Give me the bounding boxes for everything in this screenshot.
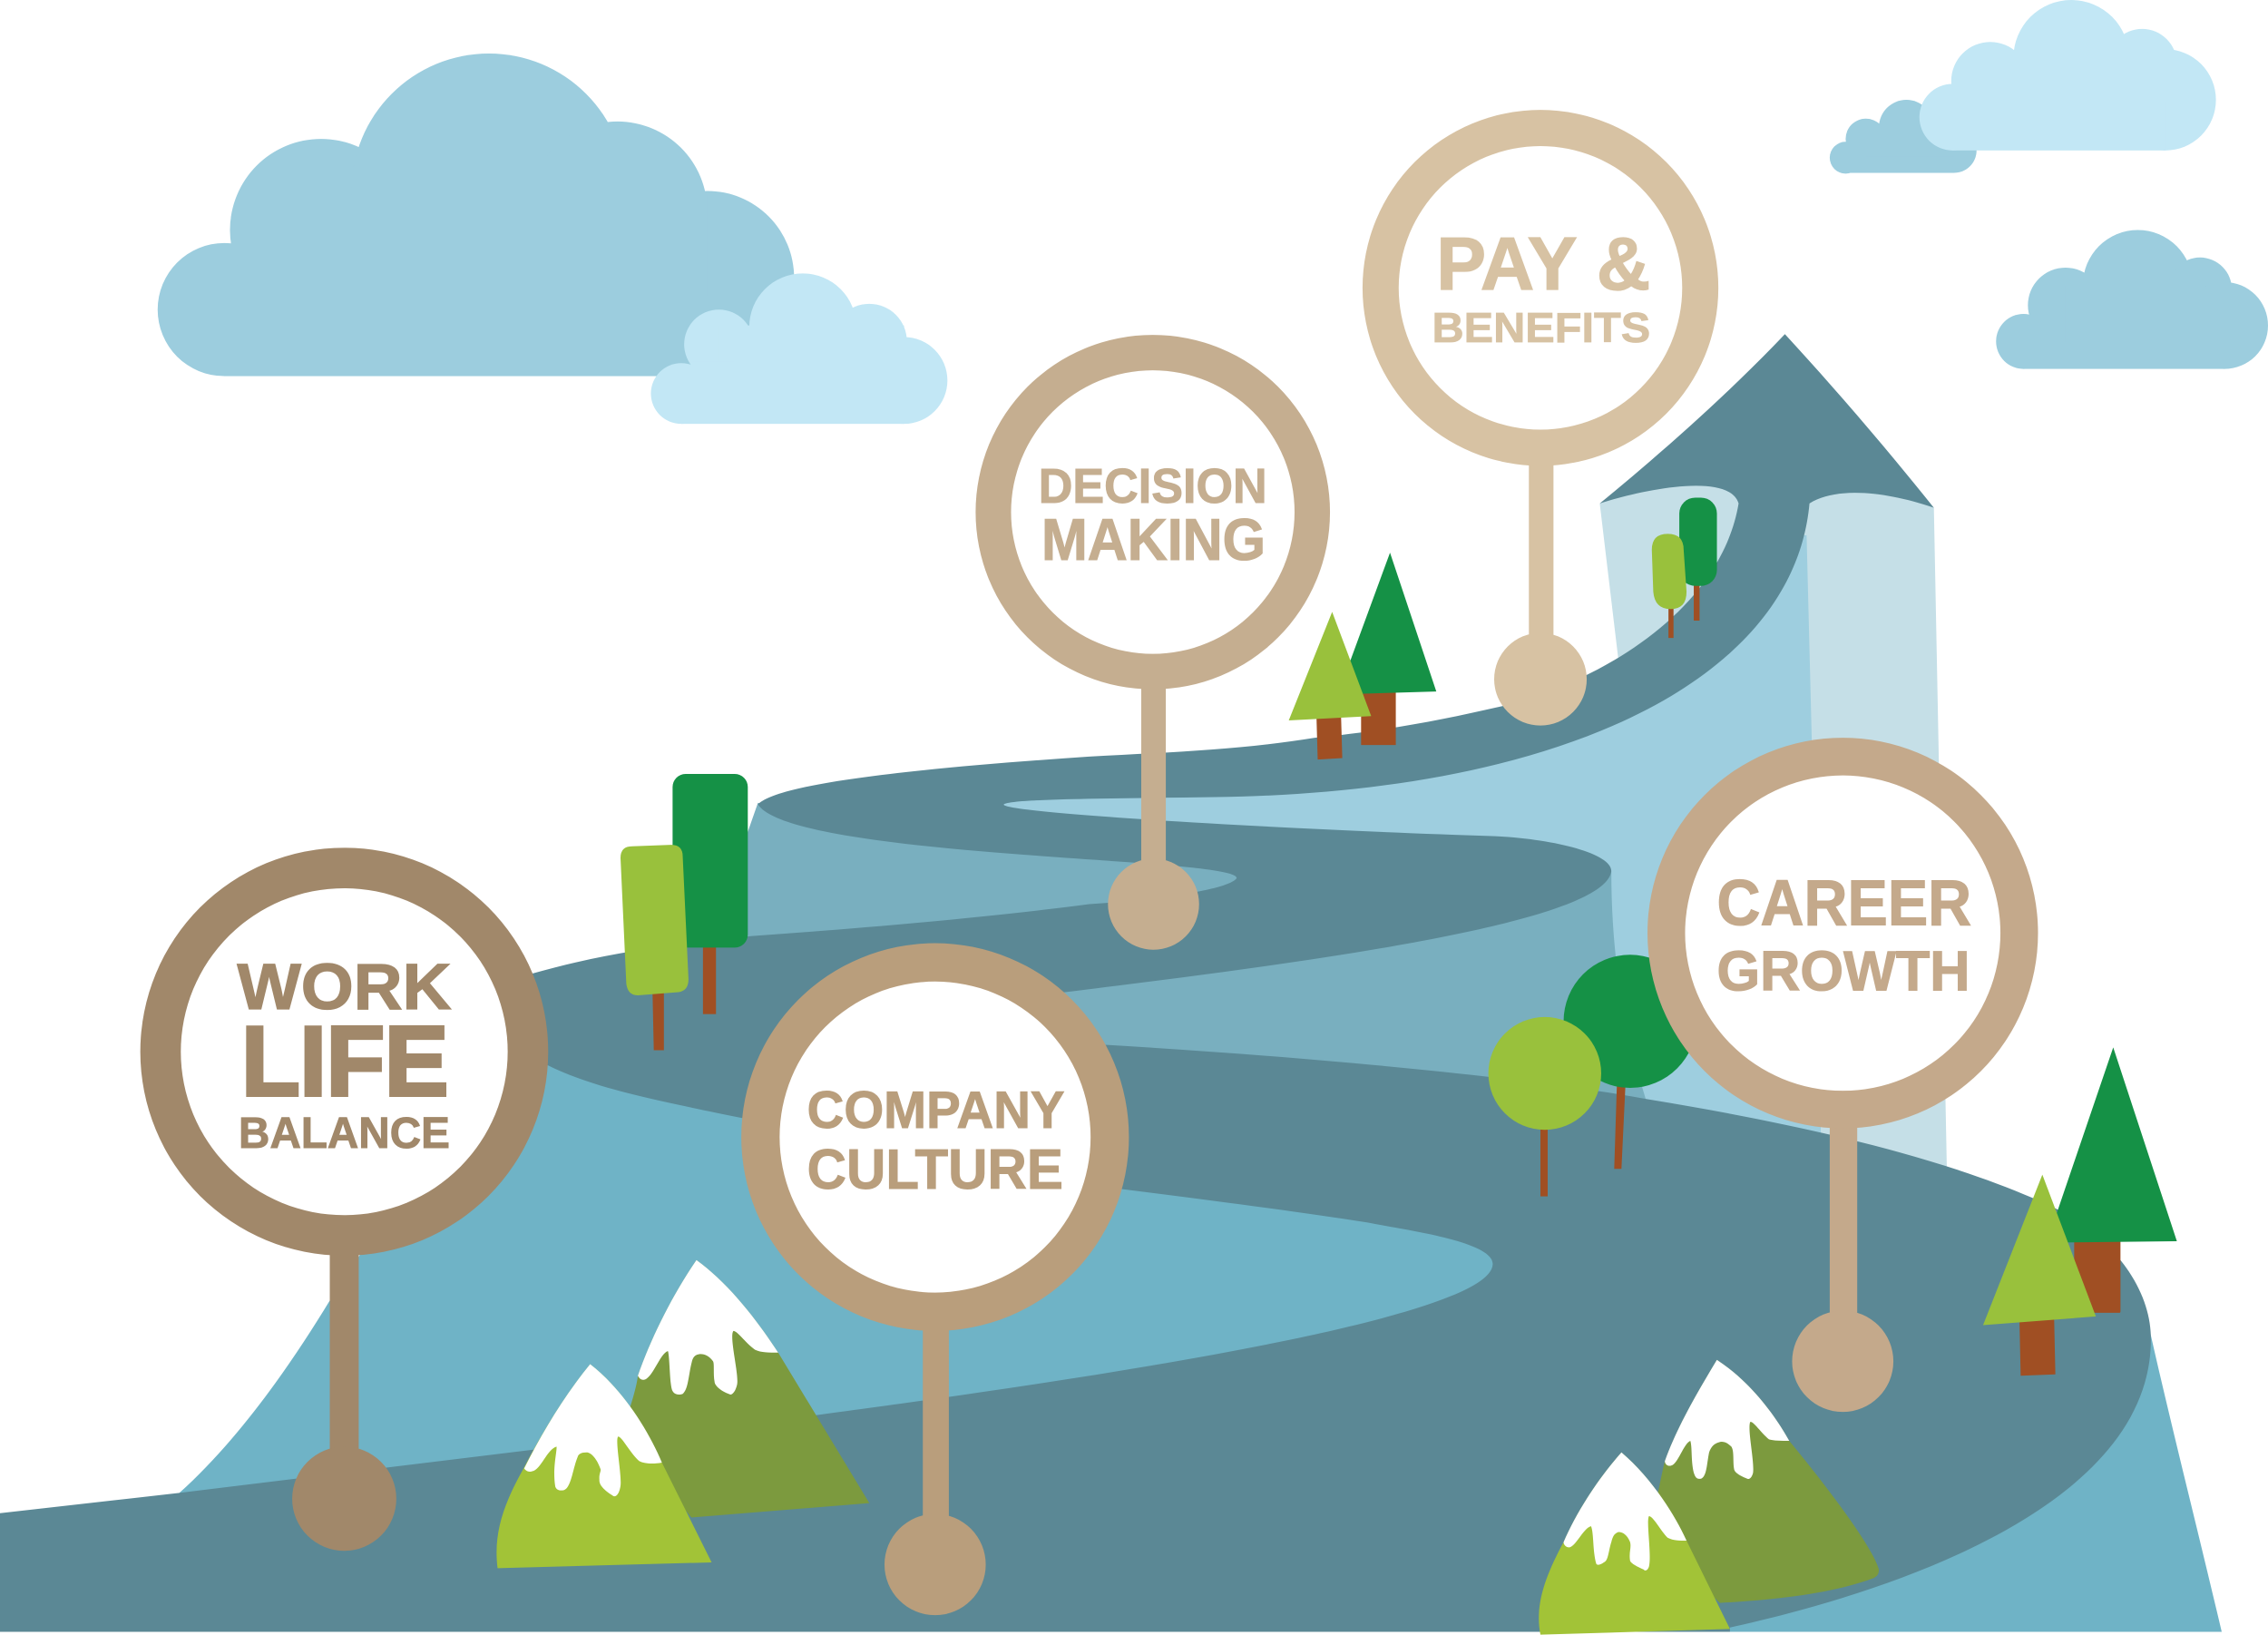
cloud: top right front [1920,0,2216,151]
label: DECISION [1039,460,1267,514]
tree: dark green triangle right [2047,1047,2177,1313]
sign base knob [292,1446,396,1551]
dark road ribbon [0,334,2151,1631]
cloud: right middle [1996,230,2268,369]
tree: dark green round [1564,955,1696,1169]
label line two: GROWTH [1717,940,1970,1003]
sign base knob [1792,1311,1893,1412]
label: PAY & [1436,221,1650,306]
snow cap [1665,1360,1789,1479]
label line two: BENEFITS [1432,304,1650,351]
cloud: small pale left [650,273,947,424]
sign face [779,982,1090,1293]
sign: decision making [975,335,1330,950]
tree: dark green triangle by decision sign [1338,553,1436,745]
medium teal hillside [672,803,1650,1114]
snow cap [638,1260,778,1395]
sign base knob [1494,633,1587,726]
sky blue hillside [983,535,1821,1143]
label: CAREER [1717,867,1971,940]
label line three: BALANCE [239,1109,450,1158]
label line two: LIFE [241,1006,448,1116]
tree: small light green rounded, hilltop [1652,534,1686,638]
tree: tall light green rounded [621,845,689,1051]
tree: small dark green rounded, hilltop [1679,497,1717,621]
sign: work life balance [141,847,548,1551]
label line two: MAKING [1041,506,1266,573]
sign ring [141,847,548,1256]
sign face [1011,370,1295,654]
snow cap [1564,1453,1686,1571]
pale building face behind road [1599,475,1947,1171]
sign ring [975,335,1330,690]
label line two: CULTURE [807,1139,1063,1201]
sign ring [1647,738,2038,1129]
tree: light green triangle right [1983,1175,2096,1376]
tree: tall dark green rounded [672,774,748,1014]
mountain: right front green [1539,1453,1730,1635]
cloud: top right back [1830,100,1977,173]
mountain: left back olive [622,1260,869,1518]
label: WORK [237,951,452,1023]
cloud: large left [158,54,794,377]
tree: light green triangle by decision sign [1289,612,1371,759]
light teal foreground hill [180,1042,1504,1512]
sign ring [741,944,1129,1331]
label: COMPANY [807,1082,1064,1140]
sign face [1399,146,1682,430]
sign face [181,888,508,1215]
sign base knob [1108,858,1199,950]
sign face [1685,776,2000,1091]
mountain: left front green [496,1365,711,1568]
mountain: right back olive [1649,1360,1879,1603]
sign base knob [885,1514,986,1615]
landscape: hills and winding road [0,334,2222,1631]
sign ring [1363,110,1718,465]
sign: company culture [741,944,1129,1615]
sign: career growth [1647,738,2038,1412]
tree: light green round [1489,1017,1601,1197]
sign: pay and benefits [1363,110,1718,726]
light teal right slope [1721,1302,2222,1631]
snow cap [524,1365,662,1496]
